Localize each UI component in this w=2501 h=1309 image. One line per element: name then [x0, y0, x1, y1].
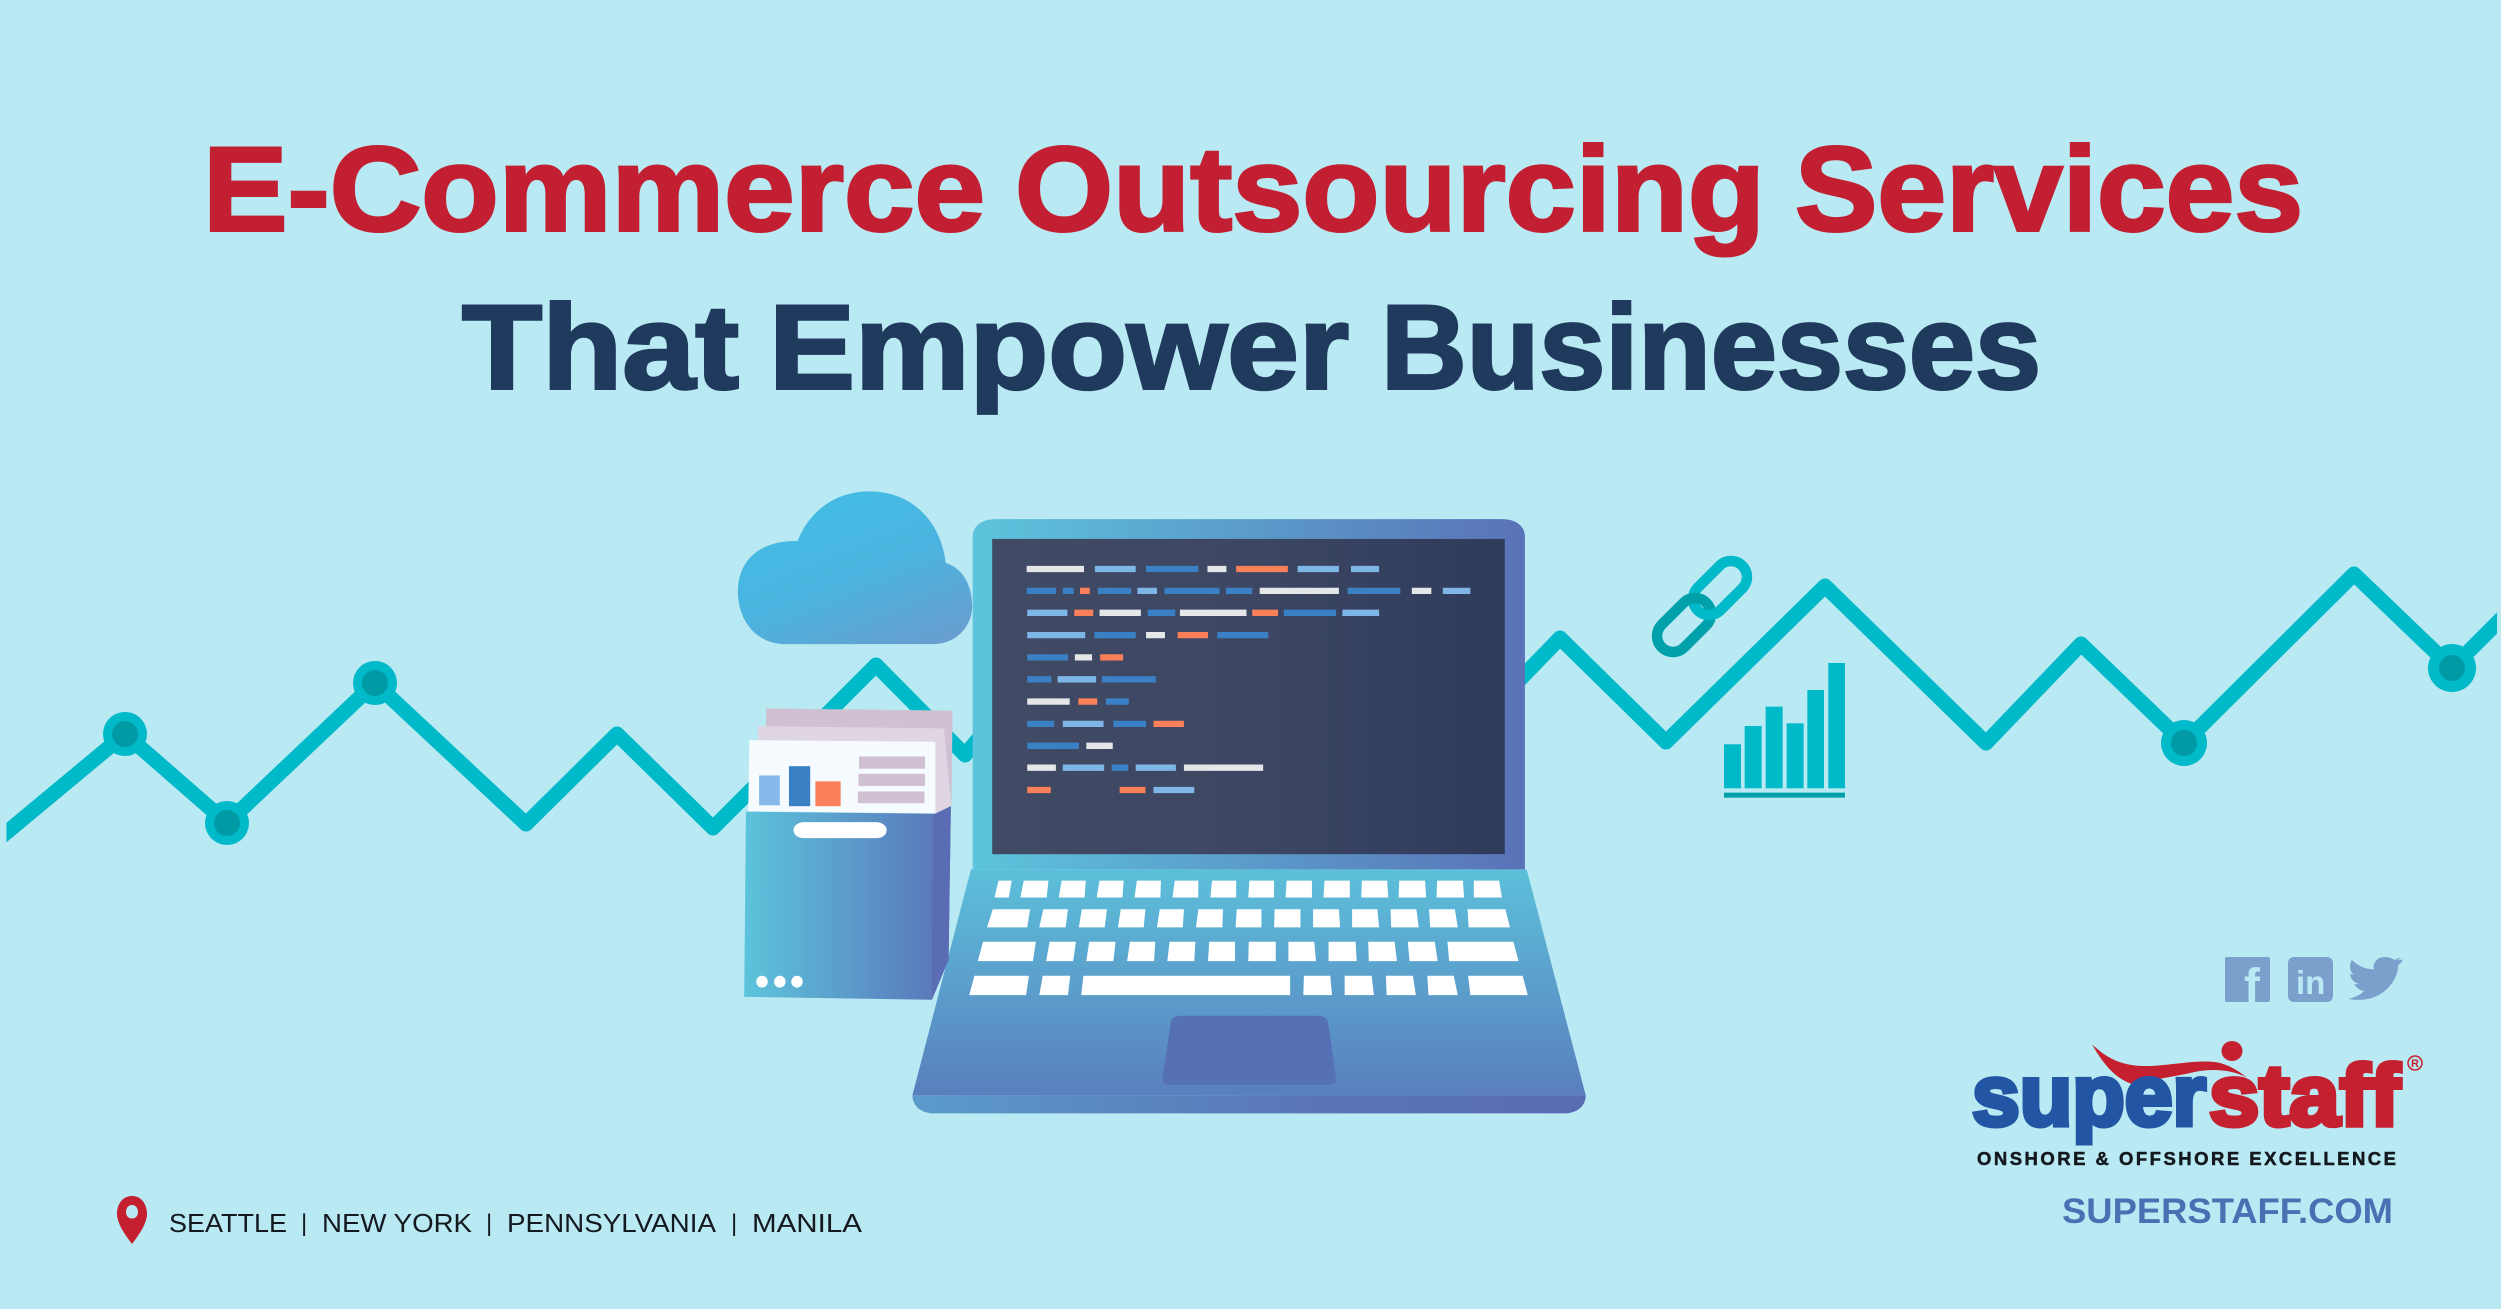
- illustration: cloud, laptop and folder: [738, 491, 1586, 1113]
- title line 1: Outsourcing: [1015, 122, 1765, 256]
- registered mark: [2408, 1056, 2422, 1070]
- title line 1: E-Commerce: [203, 122, 985, 256]
- icon: map pin: [117, 1196, 147, 1244]
- location names: SEATTLE: [169, 1208, 287, 1238]
- keyboard: [969, 881, 1528, 995]
- page bars: [759, 766, 841, 806]
- title line 2: That: [462, 280, 739, 414]
- social media icons: [2225, 957, 2403, 1013]
- title line 2: Businesses: [1381, 280, 2041, 414]
- icon: facebook: [2225, 957, 2270, 1013]
- icon: linkedin: in: [2296, 964, 2325, 1001]
- icon: linkedin: [2288, 957, 2333, 1002]
- logo word: super: super: [1972, 1048, 2206, 1144]
- folder side shade: [932, 806, 951, 1000]
- laptop lid: [973, 519, 1525, 869]
- light link: [1686, 554, 1754, 622]
- zigzag growth line chart: [0, 574, 2501, 845]
- middle page: [758, 726, 951, 813]
- folder dots: [756, 976, 803, 988]
- Superstaff logo: [1972, 1041, 2422, 1169]
- code lines on screen: [1027, 566, 1470, 793]
- node 3: [353, 661, 397, 705]
- location names: NEW YORK: [322, 1208, 473, 1238]
- location names: |: [731, 1210, 737, 1237]
- title line 1: Services: [1795, 122, 2303, 256]
- location names: |: [486, 1210, 492, 1237]
- registered mark: R: [2411, 1058, 2419, 1070]
- laptop: [912, 519, 1586, 1113]
- website: SUPERSTAFF.COM: [2062, 1192, 2393, 1231]
- location names: PENNSYLVANIA: [507, 1208, 717, 1238]
- page text lines: [858, 757, 925, 803]
- logo tagline: ONSHORE & OFFSHORE EXCELLENCE: [1977, 1148, 2396, 1169]
- laptop screen: [992, 539, 1505, 854]
- location names: [169, 1208, 863, 1238]
- node 4: [2161, 720, 2207, 766]
- icon: chain link: [1650, 554, 1754, 659]
- locations row: [117, 1196, 863, 1244]
- light link overlap: [1698, 600, 1731, 615]
- title line 2: Empower: [769, 280, 1349, 414]
- logo dot: [2222, 1041, 2242, 1061]
- icon: small bar chart: [1724, 663, 1845, 798]
- location names: |: [301, 1210, 307, 1237]
- back page: [766, 709, 953, 806]
- folder label: [794, 822, 887, 838]
- icon: twitter: [2348, 957, 2403, 1000]
- node 5: [2428, 644, 2476, 692]
- laptop front edge: [912, 1095, 1586, 1113]
- front page: [748, 740, 935, 813]
- folder body: [744, 806, 951, 1000]
- icon: facebook: f: [2244, 960, 2261, 1013]
- folder with documents: [744, 709, 953, 1000]
- node 2: [205, 801, 249, 845]
- laptop base: [912, 869, 1586, 1095]
- touchpad: [1163, 1016, 1336, 1085]
- location names: MANILA: [752, 1208, 863, 1238]
- title: [203, 122, 2303, 414]
- line: [0, 574, 2501, 842]
- title line 1: [203, 122, 2303, 256]
- logo swoosh: [2092, 1044, 2247, 1084]
- icon: cloud: [738, 491, 972, 644]
- logo word: staff: staff: [2209, 1048, 2400, 1144]
- title line 2: [462, 280, 2041, 414]
- node 1: [103, 712, 147, 756]
- dark link: [1650, 591, 1718, 659]
